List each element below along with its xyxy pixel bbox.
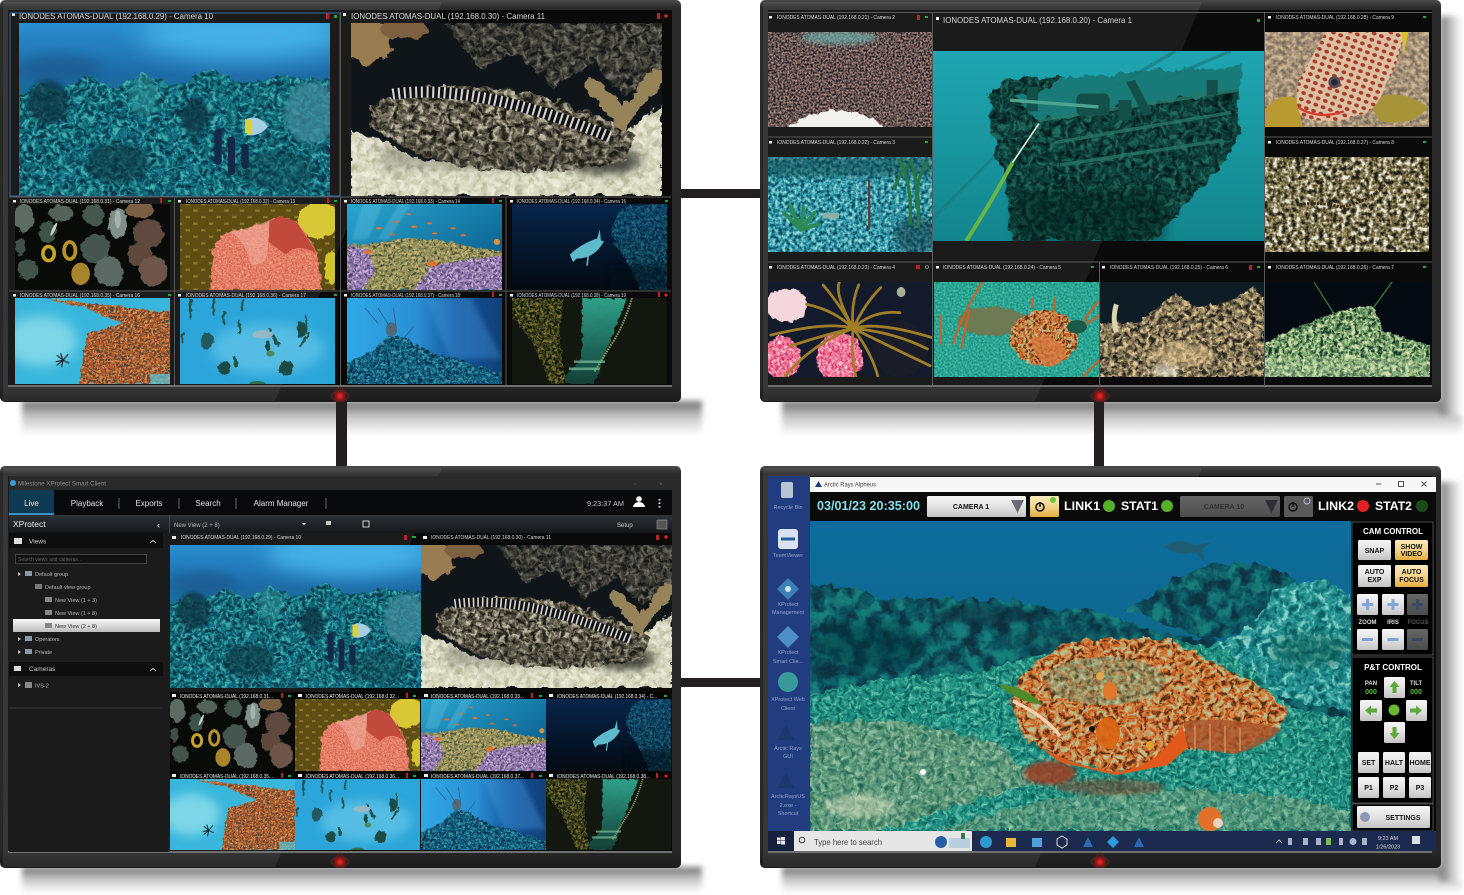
cam control buttons: FOCUS (1408, 620, 1428, 626)
camera tile: Camera 15 (510, 199, 668, 290)
camera tile: Camera 11: IONODES ATOMAS-DUAL (192.168.0.30) - Camera 11 (431, 535, 551, 541)
camera tile: Camera 17: IONODES ATOMAS-DUAL (192.168.0.36) - Camera 17 (186, 293, 306, 299)
camera tile: Camera 4: O (925, 265, 929, 271)
left panel: views and cameras: Cameras (29, 666, 56, 673)
pan and tilt control: SET (1362, 760, 1376, 767)
cam control buttons: VIDEO (1401, 551, 1423, 558)
app title bar (810, 477, 1436, 492)
pan and tilt control: P1 (1364, 785, 1373, 792)
camera tile: Camera 18 (344, 292, 502, 384)
camera tile: Camera 19 (546, 771, 671, 850)
camera tile: Camera 16 (162, 771, 295, 850)
window title bar (9, 476, 672, 490)
camera tile: Camera 5: IONODES ATOMAS-DUAL (192.168.0.24) - Camera 5 (943, 265, 1061, 271)
navigation bar: Alarm Manager (254, 499, 309, 508)
app title bar: Arctic Rays Alpheus (824, 482, 876, 488)
desktop sidebar with shortcuts: Smart Clie... (773, 659, 804, 665)
window title bar: × (659, 482, 663, 488)
windows taskbar: 9:23 AM (1378, 836, 1399, 842)
connector: top monitors (681, 189, 760, 198)
left panel: views and cameras: Search views and cameras... (18, 557, 82, 563)
camera tile: Camera 9: IONODES ATOMAS-DUAL (192.168.0.28) - Camera 9 (1276, 15, 1394, 21)
camera tile: Camera 18: IONODES ATOMAS-DUAL (192.168.0.37... (431, 774, 524, 780)
app top toolbar: CAMERA 1 (953, 504, 989, 511)
desktop sidebar with shortcuts: GUI (783, 754, 793, 760)
connector: left monitors (336, 400, 347, 468)
left panel: views and cameras: Default group (35, 572, 68, 578)
panel: top-right monitor (760, 0, 1441, 405)
main camera view: scorpionfish (810, 521, 1351, 831)
camera tile: Camera 4: IONODES ATOMAS-DUAL (192.168.0.23) - Camera 4 (777, 265, 895, 271)
camera tile: Camera 6: IONODES ATOMAS-DUAL (192.168.0.25) - Camera 6 (1110, 265, 1228, 271)
camera tile: Camera 14: IONODES ATOMAS-DUAL (192.168.0.33... (431, 694, 524, 700)
navigation bar: Live (24, 499, 39, 508)
camera tile: Camera 19: IONODES ATOMAS-DUAL (192.168.0.38) - Camera 19 (517, 293, 626, 299)
pan and tilt control (1358, 663, 1431, 798)
camera tile: Camera 11: IONODES ATOMAS-DUAL (192.168.0.30) - Camera 11 (351, 12, 546, 21)
camera tile: Camera 12: IONODES ATOMAS-DUAL (192.168.0.31) - Camera 12 (20, 199, 140, 205)
cam control buttons: CAM CONTROL (1363, 527, 1423, 536)
desktop sidebar with shortcuts: Shortcut (778, 811, 799, 817)
pan and tilt control: HALT (1385, 760, 1404, 767)
navigation bar: 9:23:37 AM (587, 499, 624, 508)
settings button: SETTINGS (1385, 815, 1421, 822)
desktop sidebar with shortcuts: TeamViewer (773, 553, 803, 559)
desktop sidebar with shortcuts: Arctic Rays (774, 746, 802, 752)
left panel: views and cameras: Private (35, 650, 52, 656)
camera tile: Camera 9 (1264, 15, 1429, 127)
toolbar: ‹ (157, 520, 160, 530)
camera tile: Camera 12 (169, 692, 295, 771)
camera tile: Camera 14: IONODES ATOMAS-DUAL (192.168.0.33) - Camera 14 (351, 199, 460, 205)
camera tile: Camera 16 (5, 293, 171, 384)
camera tile: Camera 4 (763, 265, 933, 383)
desktop sidebar with shortcuts: Management (772, 610, 805, 616)
cam control buttons (1357, 527, 1428, 650)
camera tile: Camera 17 (295, 771, 420, 853)
cam control buttons: EXP (1367, 577, 1382, 584)
left panel: views and cameras: IVS-2 (35, 684, 49, 690)
windows taskbar: Type here to search (814, 838, 882, 847)
connector: right monitors (1094, 400, 1104, 468)
navigation bar: Playback (71, 499, 104, 508)
camera tile: Camera 2 (768, 15, 932, 130)
desktop sidebar with shortcuts: XProtect Web (771, 697, 805, 703)
camera tile: Camera 17: IONODES ATOMAS-DUAL (192.168.0.36... (306, 774, 399, 780)
camera tile: Camera 19 (510, 292, 668, 384)
camera tile: Camera 5 (934, 265, 1099, 377)
camera tile: Camera 16: IONODES ATOMAS-DUAL (192.168.0.35) - Camera 16 (20, 293, 140, 299)
left panel: views and cameras: New View (2 + 8) (55, 624, 97, 630)
desktop sidebar with shortcuts: Recycle Bin (773, 505, 803, 511)
panel: bottom-right monitor Alpheus application (760, 466, 1441, 871)
toolbar: New View (2 + 8) (174, 523, 220, 529)
camera tile: Camera 16: IONODES ATOMAS-DUAL (192.168.0.35... (180, 774, 273, 780)
desktop sidebar with shortcuts: 2.exe - (780, 803, 797, 809)
cam control buttons: AUTO (1365, 569, 1385, 576)
desktop sidebar with shortcuts: XProtect (777, 650, 799, 656)
camera tile: Camera 1 main view: IONODES ATOMAS-DUAL (192.168.0.20) - Camera 1 (943, 15, 1132, 25)
desktop sidebar with shortcuts: ArcticRaysUS (771, 794, 805, 800)
app top toolbar: STAT2 (1375, 499, 1412, 513)
camera tile: Camera 15: IONODES ATOMAS-DUAL (192.168.0.34) - Camera 15 (517, 199, 626, 205)
camera tile: Camera 10: IONODES ATOMAS-DUAL (192.168.0.29) - Camera 10 (19, 12, 214, 21)
left panel: views and cameras: Operators (35, 637, 60, 643)
desktop sidebar with shortcuts: Client (781, 706, 796, 712)
window title bar: ▫ (634, 482, 636, 488)
camera tile: Camera 14 (421, 692, 546, 771)
camera tile: Camera 13 (295, 692, 423, 771)
app top toolbar: LINK1 (1064, 499, 1100, 513)
camera tile: Camera 3: IONODES ATOMAS-DUAL (192.168.0.22) - Camera 3 (777, 140, 895, 146)
app top toolbar (810, 492, 1436, 521)
left panel: views and cameras: New View (1 + 3) (55, 598, 97, 604)
app top toolbar: 03/01/23 20:35:00 (817, 499, 920, 513)
left panel: views and cameras: Default view group (45, 585, 91, 591)
left panel: views and cameras: New View (1 + 8) (55, 611, 97, 617)
panel: top-left monitor (0, 0, 681, 405)
camera tile: Camera 7 (1265, 265, 1430, 377)
navigation bar: Search (195, 499, 221, 508)
camera tile: Camera 12 (13, 198, 171, 290)
camera tile: Camera 13: IONODES ATOMAS-DUAL (192.168.0.32... (306, 694, 399, 700)
left panel: views and cameras: Views (29, 538, 47, 546)
camera tile: Camera 15: IONODES ATOMAS-DUAL (192.168.0.34) - C... (557, 694, 657, 700)
camera tile: Camera 18 (421, 771, 546, 850)
cam control buttons: SNAP (1365, 548, 1385, 555)
toolbar (9, 515, 672, 533)
cam control buttons: FOCUS (1399, 577, 1424, 584)
camera tile: Camera 10 (10, 7, 346, 196)
camera tile: Camera 10: IONODES ATOMAS-DUAL (192.168.0.29) - Camera 10 (181, 535, 301, 541)
camera tile: Camera 7: IONODES ATOMAS-DUAL (192.168.0.26) - Camera 7 (1276, 265, 1394, 271)
cam control buttons: SHOW (1401, 544, 1423, 551)
camera tile: Camera 8 (1264, 140, 1429, 252)
control column (1351, 521, 1436, 832)
app top toolbar: STAT1 (1121, 499, 1158, 513)
toolbar: XProtect (13, 519, 46, 529)
camera tile: Camera 11 (414, 535, 672, 688)
pan and tilt control: 000 (1410, 689, 1422, 696)
pan and tilt control: P&T CONTROL (1364, 663, 1422, 672)
pan and tilt control: P3 (1416, 785, 1424, 792)
pan and tilt control: PAN (1365, 681, 1377, 687)
camera tile: Camera 8: IONODES ATOMAS-DUAL (192.168.0.27) - Camera 8 (1276, 140, 1394, 146)
settings button (1357, 806, 1430, 828)
cam control buttons: ZOOM (1358, 620, 1376, 626)
app top toolbar: LINK2 (1318, 499, 1354, 513)
camera tile: Camera 2: IONODES ATOMAS-DUAL (192.168.0.21) - Camera 2 (777, 15, 895, 21)
toolbar: Setup (617, 523, 633, 529)
camera tile: Camera 1 main view (933, 15, 1264, 241)
camera tile: Camera 19: IONODES ATOMAS-DUAL (192.168.0.38... (557, 774, 650, 780)
navigation bar: Exports (135, 499, 163, 508)
camera tile: Camera 10 (170, 532, 434, 688)
pan and tilt control: 000 (1365, 689, 1377, 696)
desktop sidebar with shortcuts: XProtect (777, 602, 799, 608)
pan and tilt control: HOME (1410, 760, 1431, 767)
desktop sidebar with shortcuts (768, 476, 810, 832)
windows taskbar (768, 831, 1436, 851)
panel: bottom-left monitor XProtect client (0, 466, 681, 871)
camera tile: Camera 15 (546, 692, 671, 771)
connector: bottom monitors (681, 678, 760, 687)
camera tile: Camera 11 (343, 12, 668, 196)
pan and tilt control: TILT (1410, 681, 1422, 687)
camera tile: Camera 3 (768, 140, 937, 254)
camera tile: Camera 6 (1100, 265, 1264, 378)
camera tile: Camera 14 (344, 198, 502, 290)
windows taskbar: 1/26/2023 (1376, 844, 1400, 850)
pan and tilt control: P2 (1390, 785, 1398, 792)
camera tile: Camera 17 (178, 293, 337, 387)
cam control buttons: AUTO (1402, 569, 1422, 576)
camera tile: Camera 18: IONODES ATOMAS-DUAL (192.168.0.37) - Camera 18 (351, 293, 460, 299)
camera tile: Camera 13 (178, 198, 339, 290)
camera tile: Camera 13: IONODES ATOMAS-DUAL (192.168.0.32) - Camera 13 (186, 199, 295, 205)
window title bar: Milestone XProtect Smart Client (18, 482, 106, 488)
cam control buttons: IRIS (1387, 620, 1399, 626)
camera tile: Camera 12: IONODES ATOMAS-DUAL (192.168.0.31... (180, 694, 273, 700)
navigation bar (9, 490, 672, 515)
left panel: views and cameras (9, 533, 169, 852)
app top toolbar: CAMERA 10 (1204, 504, 1244, 511)
